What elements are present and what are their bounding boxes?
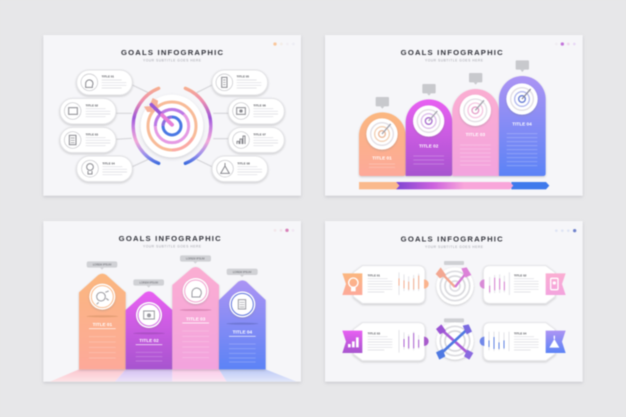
item 08 [212,156,268,182]
heading: GOALS INFOGRAPHIC [121,48,223,57]
item 02 [60,98,116,124]
item 01: TITLE 01 [102,75,114,79]
floor reflection [50,369,297,382]
column 03: TITLE 03 [466,132,485,137]
column 01: LOREM IPSUM [93,263,111,267]
card 03 [342,323,429,361]
panel: bottom left house columns [43,221,301,382]
heading: GOALS INFOGRAPHIC [401,235,503,244]
target [141,95,203,157]
panel: top left radial target [43,35,301,196]
column 03: TITLE 03 [186,316,206,321]
column 02 [126,279,172,369]
item 06 [228,98,284,124]
column 01 [79,261,126,369]
column 03 [452,73,499,176]
column 04 [219,269,266,369]
bottom target with crossed darts [436,318,474,360]
card 04: TITLE 04 [514,331,527,335]
outer arcs [133,88,211,163]
item 05 [212,70,268,95]
card 03: TITLE 03 [368,331,380,335]
top target with darts [436,261,474,305]
column 02: TITLE 02 [139,338,159,343]
subtitle: YOUR SUBTITLE GOES HERE [143,58,202,62]
item 04: TITLE 04 [102,161,115,165]
item 01 [77,70,132,95]
panel: bottom right cards and darts [325,221,583,382]
panel: top right arch bars [325,35,583,196]
column 01 [359,97,406,176]
card 02: TITLE 02 [514,273,527,277]
column 02 [406,84,452,176]
column 02: LOREM IPSUM [139,281,158,285]
column 04: LOREM IPSUM [233,270,251,274]
pagination dots [273,42,295,46]
item 07 [228,127,284,153]
column 02: TITLE 02 [419,144,439,149]
connector lines [116,85,228,167]
dart [144,98,172,125]
column 04 [499,60,546,176]
column 03 [172,255,219,369]
card 02 [480,266,566,303]
heading: GOALS INFOGRAPHIC [401,48,503,57]
item 03: TITLE 03 [86,132,98,136]
item 06: TITLE 06 [253,103,266,107]
column 04: TITLE 04 [512,121,532,126]
item 04 [77,156,132,182]
heading: GOALS INFOGRAPHIC [119,234,221,243]
subtitle: YOUR SUBTITLE GOES HERE [425,58,484,62]
column 01: TITLE 01 [372,155,392,160]
pagination dots [555,229,576,232]
pagination dots [555,42,576,46]
pagination dots [274,229,294,232]
column 01: TITLE 01 [93,322,112,327]
column 03: LOREM IPSUM [186,257,205,261]
card 01: TITLE 01 [368,273,380,277]
item 05: TITLE 05 [237,75,249,79]
card 04 [480,323,566,361]
column 04: TITLE 04 [233,330,252,335]
subtitle: YOUR SUBTITLE GOES HERE [143,244,202,248]
card 01 [342,266,429,303]
item 07: TITLE 07 [253,132,266,136]
subtitle: YOUR SUBTITLE GOES HERE [425,245,484,249]
item 02: TITLE 02 [86,103,98,107]
item 03 [60,127,116,153]
item 08: TITLE 08 [237,161,250,165]
timeline arrow bar [359,182,549,189]
